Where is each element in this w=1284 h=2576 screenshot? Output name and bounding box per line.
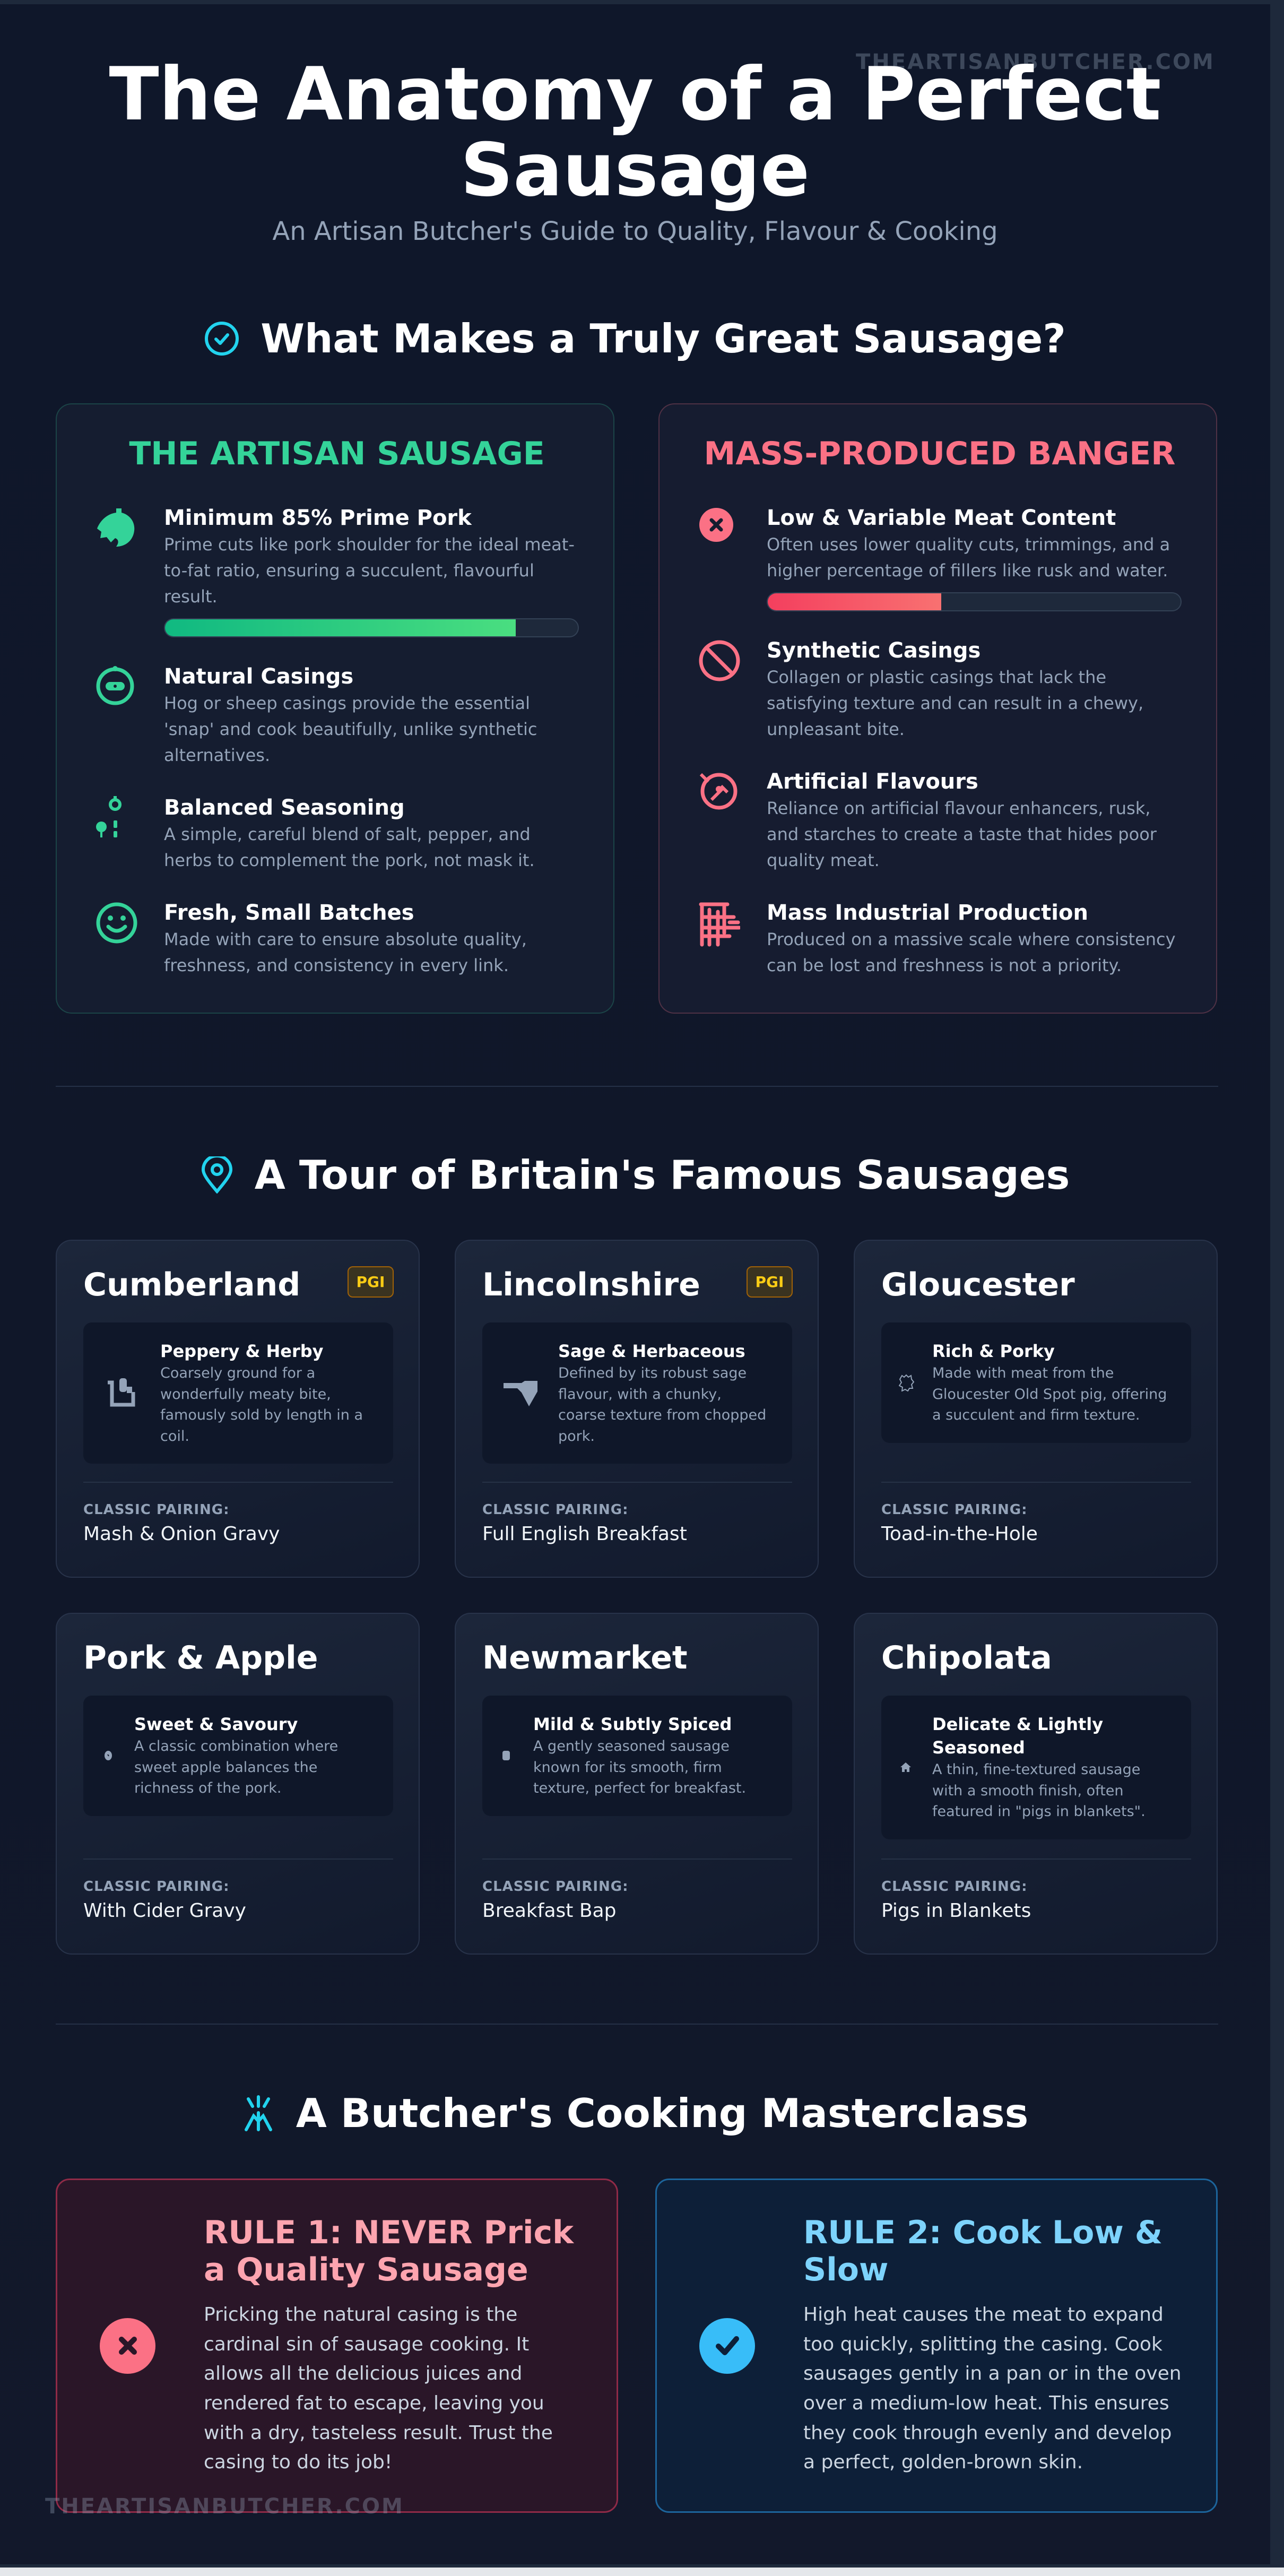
item: low meat <box>699 506 1182 611</box>
card: Newmarket: Mild & Subtly Spiced <box>533 1714 732 1734</box>
icon: coil <box>108 1378 135 1406</box>
card: Chipolata: CLASSIC PAIRING: <box>881 1879 1028 1895</box>
card: Pork & Apple: Pork & Apple <box>83 1639 318 1676</box>
card: Gloucester <box>854 1240 1218 1578</box>
item: industrial production: Produced on a massive scale where consistency can be lost and freshness is not a priority. <box>767 929 1176 975</box>
heading: tour of Britain: A Tour of Britain's Famous Sausages <box>255 1152 1070 1198</box>
heading: what makes a great sausage: What Makes a Truly Great Sausage? <box>261 315 1066 362</box>
item: seasoning <box>96 796 535 870</box>
card: Lincolnshire <box>455 1240 819 1578</box>
item: artificial flavours: Reliance on artificial flavour enhancers, rusk, and starches to create a taste that hides poor quality meat. <box>767 798 1157 870</box>
icon: house <box>900 1762 911 1772</box>
item: prime pork: Minimum 85% Prime Pork <box>164 506 472 530</box>
card: Cumberland: Coarsely ground for a wonderfully meaty bite, famously sold by length in a coil. <box>160 1365 363 1445</box>
item: industrial production <box>699 901 1176 975</box>
panel: artisan sausage <box>56 403 614 1014</box>
card: Pork & Apple: A classic combination where sweet apple balances the richness of the pork. <box>134 1738 338 1796</box>
rule card 2: RULE 2: Cook Low & Slow <box>803 2214 1162 2288</box>
rule card 2: High heat causes the meat to expand too quickly, splitting the casing. Cook sausages gently in a pan or in the oven over a medium-low heat. This ensures they cook through evenly and develop a perfect, golden-brown skin. <box>803 2304 1182 2473</box>
card: Cumberland <box>56 1240 420 1578</box>
badge: PGI <box>348 1266 394 1298</box>
card: Chipolata: Chipolata <box>881 1639 1052 1676</box>
item: natural casings <box>97 664 537 765</box>
rule card 2 <box>655 2179 1218 2513</box>
item: synthetic casings: Synthetic Casings <box>767 638 981 663</box>
panel heading: artisan: THE ARTISAN SAUSAGE <box>129 435 545 472</box>
panel: mass-produced banger <box>658 403 1217 1014</box>
card: Chipolata: Pigs in Blankets <box>881 1900 1031 1922</box>
card: Gloucester: Gloucester <box>881 1266 1075 1303</box>
subtitle: An Artisan Butcher's Guide to Quality, Flavour & Cooking <box>272 217 998 246</box>
card: Newmarket <box>455 1613 819 1955</box>
item: low meat: Low & Variable Meat Content <box>767 506 1116 530</box>
badge: PGI: PGI <box>357 1273 385 1291</box>
icon: pig <box>899 1375 915 1391</box>
card: Pork & Apple <box>56 1613 420 1955</box>
card: Gloucester: Made with meat from the Gloucester Old Spot pig, offering a succulent and firm texture. <box>932 1365 1167 1423</box>
bar: 85% <box>164 618 579 637</box>
panel heading: mass-produced: MASS-PRODUCED BANGER <box>704 435 1176 472</box>
item: natural casings: Natural Casings <box>164 664 353 689</box>
card: Lincolnshire: Sage & Herbaceous <box>558 1341 745 1361</box>
rule card 1: Pricking the natural casing is the cardinal sin of sausage cooking. It allows all the delicious juices and rendered fat to escape, leaving you with a dry, tasteless result. Trust the casing to do its job! <box>204 2304 553 2473</box>
item: artificial flavours: Artificial Flavours <box>767 770 978 794</box>
item: synthetic casings: Collagen or plastic casings that lack the satisfying texture and can result in a chewy, unpleasant bite. <box>767 667 1143 739</box>
title: Sausage <box>461 127 810 213</box>
card: Newmarket: Newmarket <box>482 1639 688 1676</box>
badge: PGI <box>747 1266 793 1298</box>
card: Newmarket: Breakfast Bap <box>482 1900 616 1922</box>
card: Cumberland: Peppery & Herby <box>160 1341 324 1361</box>
item: seasoning: A simple, careful blend of salt, pepper, and herbs to complement the pork, not mask it. <box>164 824 535 870</box>
card: Chipolata <box>854 1613 1218 1955</box>
card: Pork & Apple: CLASSIC PAIRING: <box>83 1879 230 1895</box>
card: Lincolnshire: CLASSIC PAIRING: <box>482 1502 629 1518</box>
card: Newmarket: CLASSIC PAIRING: <box>482 1879 629 1895</box>
item: small batches: Fresh, Small Batches <box>164 901 414 925</box>
item: industrial production: Mass Industrial Production <box>767 901 1088 925</box>
badge: PGI: PGI <box>756 1273 784 1291</box>
card: Lincolnshire: Defined by its robust sage flavour, with a chunky, coarse texture from chopped pork. <box>558 1365 766 1445</box>
heading: cooking masterclass: A Butcher's Cooking Masterclass <box>296 2090 1028 2137</box>
item: natural casings: Hog or sheep casings provide the essential 'snap' and cook beautifully, unlike synthetic alternatives. <box>164 693 537 765</box>
card: Gloucester: Rich & Porky <box>932 1341 1055 1361</box>
card: Chipolata: A thin, fine-textured sausage with a smooth finish, often featured in "pigs in blankets". <box>932 1761 1146 1820</box>
watermark bottom: THEARTISANBUTCHER.COM <box>45 2494 404 2519</box>
watermark top: THEARTISANBUTCHER.COM <box>856 50 1215 74</box>
rule card 1: RULE 1: NEVER Prick a Quality Sausage <box>204 2214 574 2288</box>
card: Gloucester: Toad-in-the-Hole <box>881 1523 1038 1545</box>
icon: check circle <box>699 2318 755 2373</box>
card: Lincolnshire: Lincolnshire <box>482 1266 700 1303</box>
card: Pork & Apple: Sweet & Savoury <box>134 1714 298 1734</box>
icon: apple <box>105 1751 112 1760</box>
item: small batches: Made with care to ensure absolute quality, freshness, and consistency in every link. <box>164 929 527 975</box>
card: Cumberland: Mash & Onion Gravy <box>83 1523 280 1545</box>
card: Cumberland: Cumberland <box>83 1266 300 1303</box>
icon: bap <box>502 1751 510 1760</box>
card: Chipolata: Delicate & Lightly Seasoned <box>932 1714 1103 1758</box>
card: Pork & Apple: With Cider Gravy <box>83 1900 246 1922</box>
title: The Anatomy of a Perfect <box>109 51 1161 137</box>
item: prime pork <box>97 506 579 637</box>
item: prime pork: Prime cuts like pork shoulder for the ideal meat-to-fat ratio, ensuring a succulent, flavourful result. <box>164 534 575 607</box>
item: small batches <box>97 901 527 975</box>
card: Cumberland: CLASSIC PAIRING: <box>83 1502 230 1518</box>
rule card 1 <box>56 2179 618 2513</box>
card: Lincolnshire: Full English Breakfast <box>482 1523 687 1545</box>
bar: 42% <box>767 592 1182 611</box>
icon: sage leaf <box>504 1381 537 1406</box>
item: artificial flavours <box>699 770 1157 870</box>
card: Newmarket: A gently seasoned sausage known for its smooth, firm texture, perfect for breakfast. <box>533 1738 746 1796</box>
icon: x circle <box>100 2318 155 2373</box>
item: low meat: Often uses lower quality cuts, trimmings, and a higher percentage of fillers like rusk and water. <box>767 534 1170 581</box>
title <box>109 51 1161 213</box>
item: seasoning: Balanced Seasoning <box>164 796 405 820</box>
card: Gloucester: CLASSIC PAIRING: <box>881 1502 1028 1518</box>
item: synthetic casings <box>699 638 1143 739</box>
